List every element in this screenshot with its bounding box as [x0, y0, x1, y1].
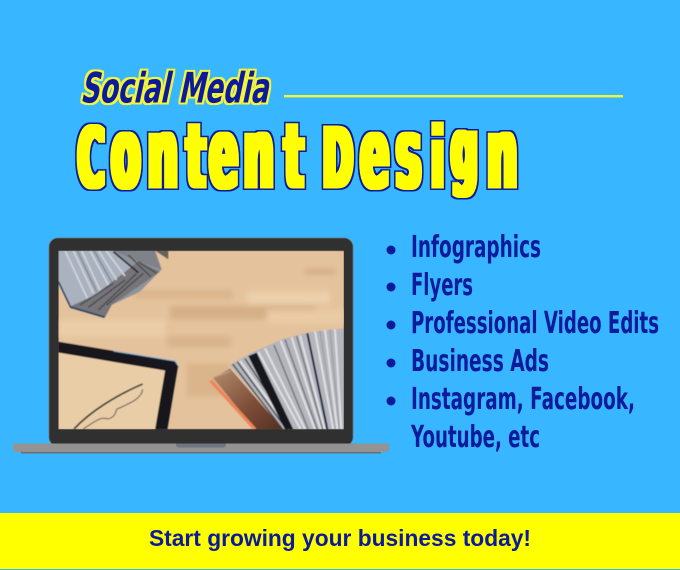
subtitle: Social Media: Social Media — [78, 65, 276, 113]
item: Business Ads — [386, 344, 549, 379]
title: Content Design: s — [396, 97, 421, 211]
item: Instagram, Facebook, Youtube, etc — [386, 382, 635, 455]
top-left book — [58, 251, 168, 317]
item: Business Ads: Business Ads — [411, 344, 549, 379]
item: Instagram, Facebook, Youtube, etc: Youtube, etc — [410, 420, 540, 455]
wooden desk — [58, 251, 344, 429]
screen photo: desk with books and glasses — [58, 251, 344, 429]
fanned book pages — [230, 328, 344, 429]
title: Content Design: e — [209, 97, 238, 211]
trackpad notch — [176, 444, 226, 448]
item: Flyers: Flyers — [411, 268, 473, 303]
title: Content Design: D — [323, 111, 353, 208]
title: Content Design: C — [78, 111, 104, 208]
title: Content Design: n — [487, 97, 517, 211]
base shadow — [21, 452, 381, 454]
title: Content Design: g — [451, 99, 478, 199]
laptop lid — [49, 238, 353, 446]
title: Content Design: e — [360, 97, 389, 211]
title: Content Design: o — [111, 97, 140, 211]
title: Content Design: n — [244, 97, 274, 211]
title: Content Design: i — [431, 108, 444, 208]
title: Content Design — [78, 97, 517, 211]
orange book cover — [211, 368, 283, 429]
footer banner — [0, 513, 680, 569]
title: Content Design: n — [148, 97, 178, 211]
item: Infographics — [386, 230, 541, 265]
title: Content Design: t — [187, 106, 205, 210]
item: Flyers — [386, 268, 473, 303]
glasses — [74, 384, 143, 429]
title: Content Design: t — [285, 106, 317, 210]
laptop base — [13, 444, 389, 452]
tablet with glasses — [58, 342, 178, 429]
item: Infographics: Infographics — [411, 230, 541, 265]
service list — [386, 230, 659, 455]
call to action: Start growing your business today! — [149, 525, 531, 551]
decorative rule beside subtitle — [284, 95, 623, 97]
laptop illustration — [13, 238, 389, 454]
